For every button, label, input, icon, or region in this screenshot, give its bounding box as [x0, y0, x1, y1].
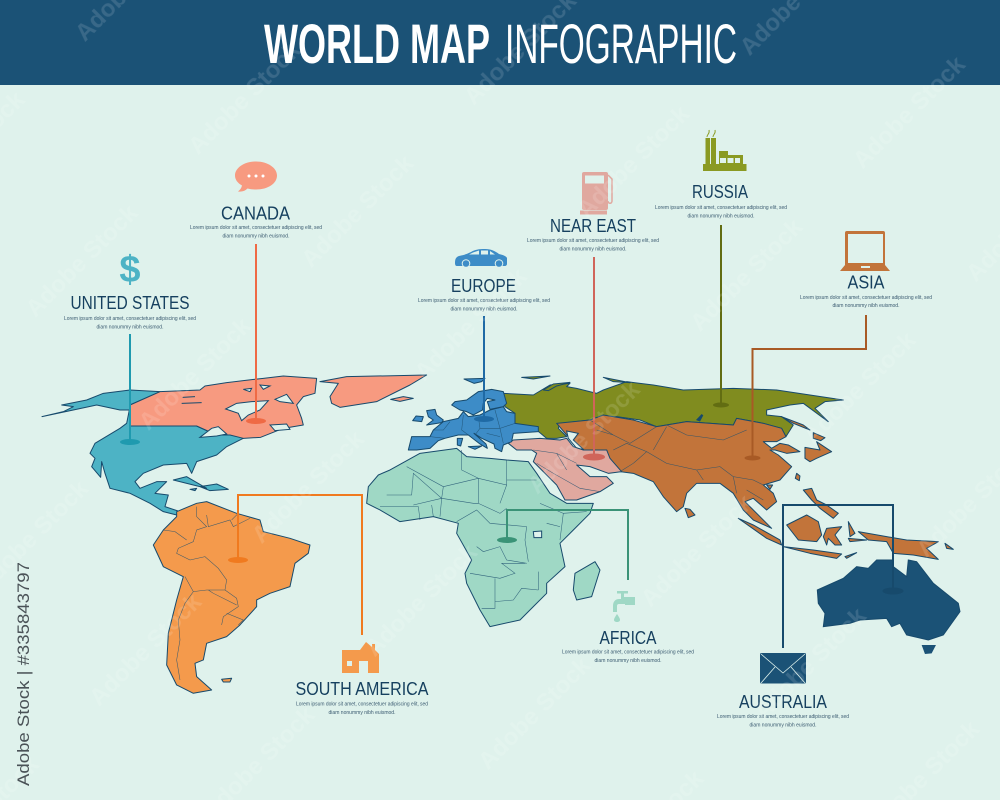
label: South America: diam nonummy nibh euismod.: [328, 710, 396, 716]
Greenland: [320, 375, 427, 407]
label: Canada: diam nonummy nibh euismod.: [222, 234, 290, 240]
world map: Oceania: [783, 488, 960, 654]
region: United States and Mexico: [42, 390, 260, 515]
label: Europe: Lorem ipsum dolor sit amet, consectetuer adipiscing elit, sed: [418, 298, 550, 304]
label: Russia: RUSSIA: [692, 182, 748, 202]
icon: laptop: [840, 231, 890, 271]
label: United States: [64, 293, 196, 330]
icon: car: [455, 249, 507, 267]
pin: Canada: [246, 244, 266, 424]
label: Canada: Lorem ipsum dolor sit amet, consectetuer adipiscing elit, sed: [190, 225, 322, 231]
pin: Africa: [497, 510, 628, 580]
icon: speech bubble: [235, 162, 277, 192]
region: Canada: [130, 376, 317, 438]
Madagascar: [573, 562, 600, 600]
region: Europe: [408, 378, 538, 452]
Indonesia and New Guinea: [783, 488, 953, 559]
pin: Australia: [783, 505, 904, 648]
icon: house: [342, 642, 379, 673]
region: South America: [153, 502, 310, 693]
label: Near East: Lorem ipsum dolor sit amet, consectetuer adipiscing elit, sed: [527, 238, 659, 244]
region: Asia: [557, 415, 832, 545]
Caspian Sea: [567, 431, 583, 449]
label: Europe: EUROPE: [451, 276, 516, 296]
icon: fuel pump: [580, 172, 612, 214]
label: Asia: ASIA: [848, 272, 884, 292]
title: WORLD MAP: [264, 12, 490, 75]
label: Canada: [190, 204, 322, 240]
icon: factory: [703, 130, 746, 171]
label: Australia: AUSTRALIA: [739, 692, 827, 712]
label: Asia: Lorem ipsum dolor sit amet, consectetuer adipiscing elit, sed: [800, 295, 932, 301]
label: Europe: diam nonummy nibh euismod.: [450, 306, 518, 312]
icon: dollar sign: $: [119, 249, 141, 291]
label: Australia: diam nonummy nibh euismod.: [750, 722, 816, 728]
label: South America: SOUTH AMERICA: [296, 679, 428, 699]
region: Africa: [367, 448, 593, 627]
subtitle word: INFOGRAPHIC: [505, 12, 737, 75]
label: Africa: Lorem ipsum dolor sit amet, consectetuer adipiscing elit, sed: [562, 650, 694, 656]
Hudson Bay and lakes: [182, 385, 293, 437]
label: Russia: Lorem ipsum dolor sit amet, consectetuer adipiscing elit, sed: [655, 205, 787, 211]
world map: Americas: [42, 375, 427, 693]
label: Asia: [800, 272, 932, 309]
region: Near East: [508, 438, 622, 500]
Asian islands: [685, 417, 832, 545]
icon: envelope: [760, 653, 806, 684]
label: Near East: diam nonummy nibh euismod.: [560, 246, 626, 252]
region: Australia: [817, 560, 960, 640]
label: Near East: [527, 216, 659, 252]
label: Africa: [562, 628, 694, 664]
label: Africa: diam nonummy nibh euismod.: [594, 658, 662, 664]
stock id side text: Adobe Stock | #335843797: [14, 562, 33, 786]
label: Australia: [717, 692, 849, 728]
label: South America: Lorem ipsum dolor sit amet, consectetuer adipiscing elit, sed: [296, 702, 428, 708]
Tasmania: [922, 645, 936, 654]
arctic islands: [522, 376, 630, 391]
pin: Europe: [474, 316, 494, 422]
label: Russia: diam nonummy nibh euismod.: [688, 214, 754, 220]
label: Europe: [418, 276, 550, 312]
label: United States: Lorem ipsum dolor sit amet, consectetuer adipiscing elit, sed: [64, 316, 196, 322]
world map: Europe, Africa, Asia: [367, 376, 843, 627]
Iceland-side islet: [391, 397, 413, 401]
label: South America: [296, 679, 428, 716]
region: Russia: [503, 382, 843, 438]
icon: water tap: [613, 591, 635, 622]
label: United States: diam nonummy nibh euismod.: [96, 324, 164, 330]
label: Canada: CANADA: [221, 204, 290, 224]
label: Russia: [655, 182, 787, 220]
label: Australia: Lorem ipsum dolor sit amet, consectetuer adipiscing elit, sed: [717, 714, 849, 720]
label: United States: UNITED STATES: [70, 293, 190, 313]
Lake Baikal: [696, 414, 703, 422]
pin: United States: [120, 334, 140, 445]
pin: Russia: [713, 225, 729, 408]
label: Near East: NEAR EAST: [550, 216, 636, 236]
pin: Near East: [583, 257, 605, 460]
label: Africa: AFRICA: [600, 628, 656, 648]
label: Asia: diam nonummy nibh euismod.: [832, 303, 900, 309]
pin: Asia: [744, 315, 866, 460]
header band: [0, 0, 1000, 85]
pin: South America: [228, 495, 362, 635]
